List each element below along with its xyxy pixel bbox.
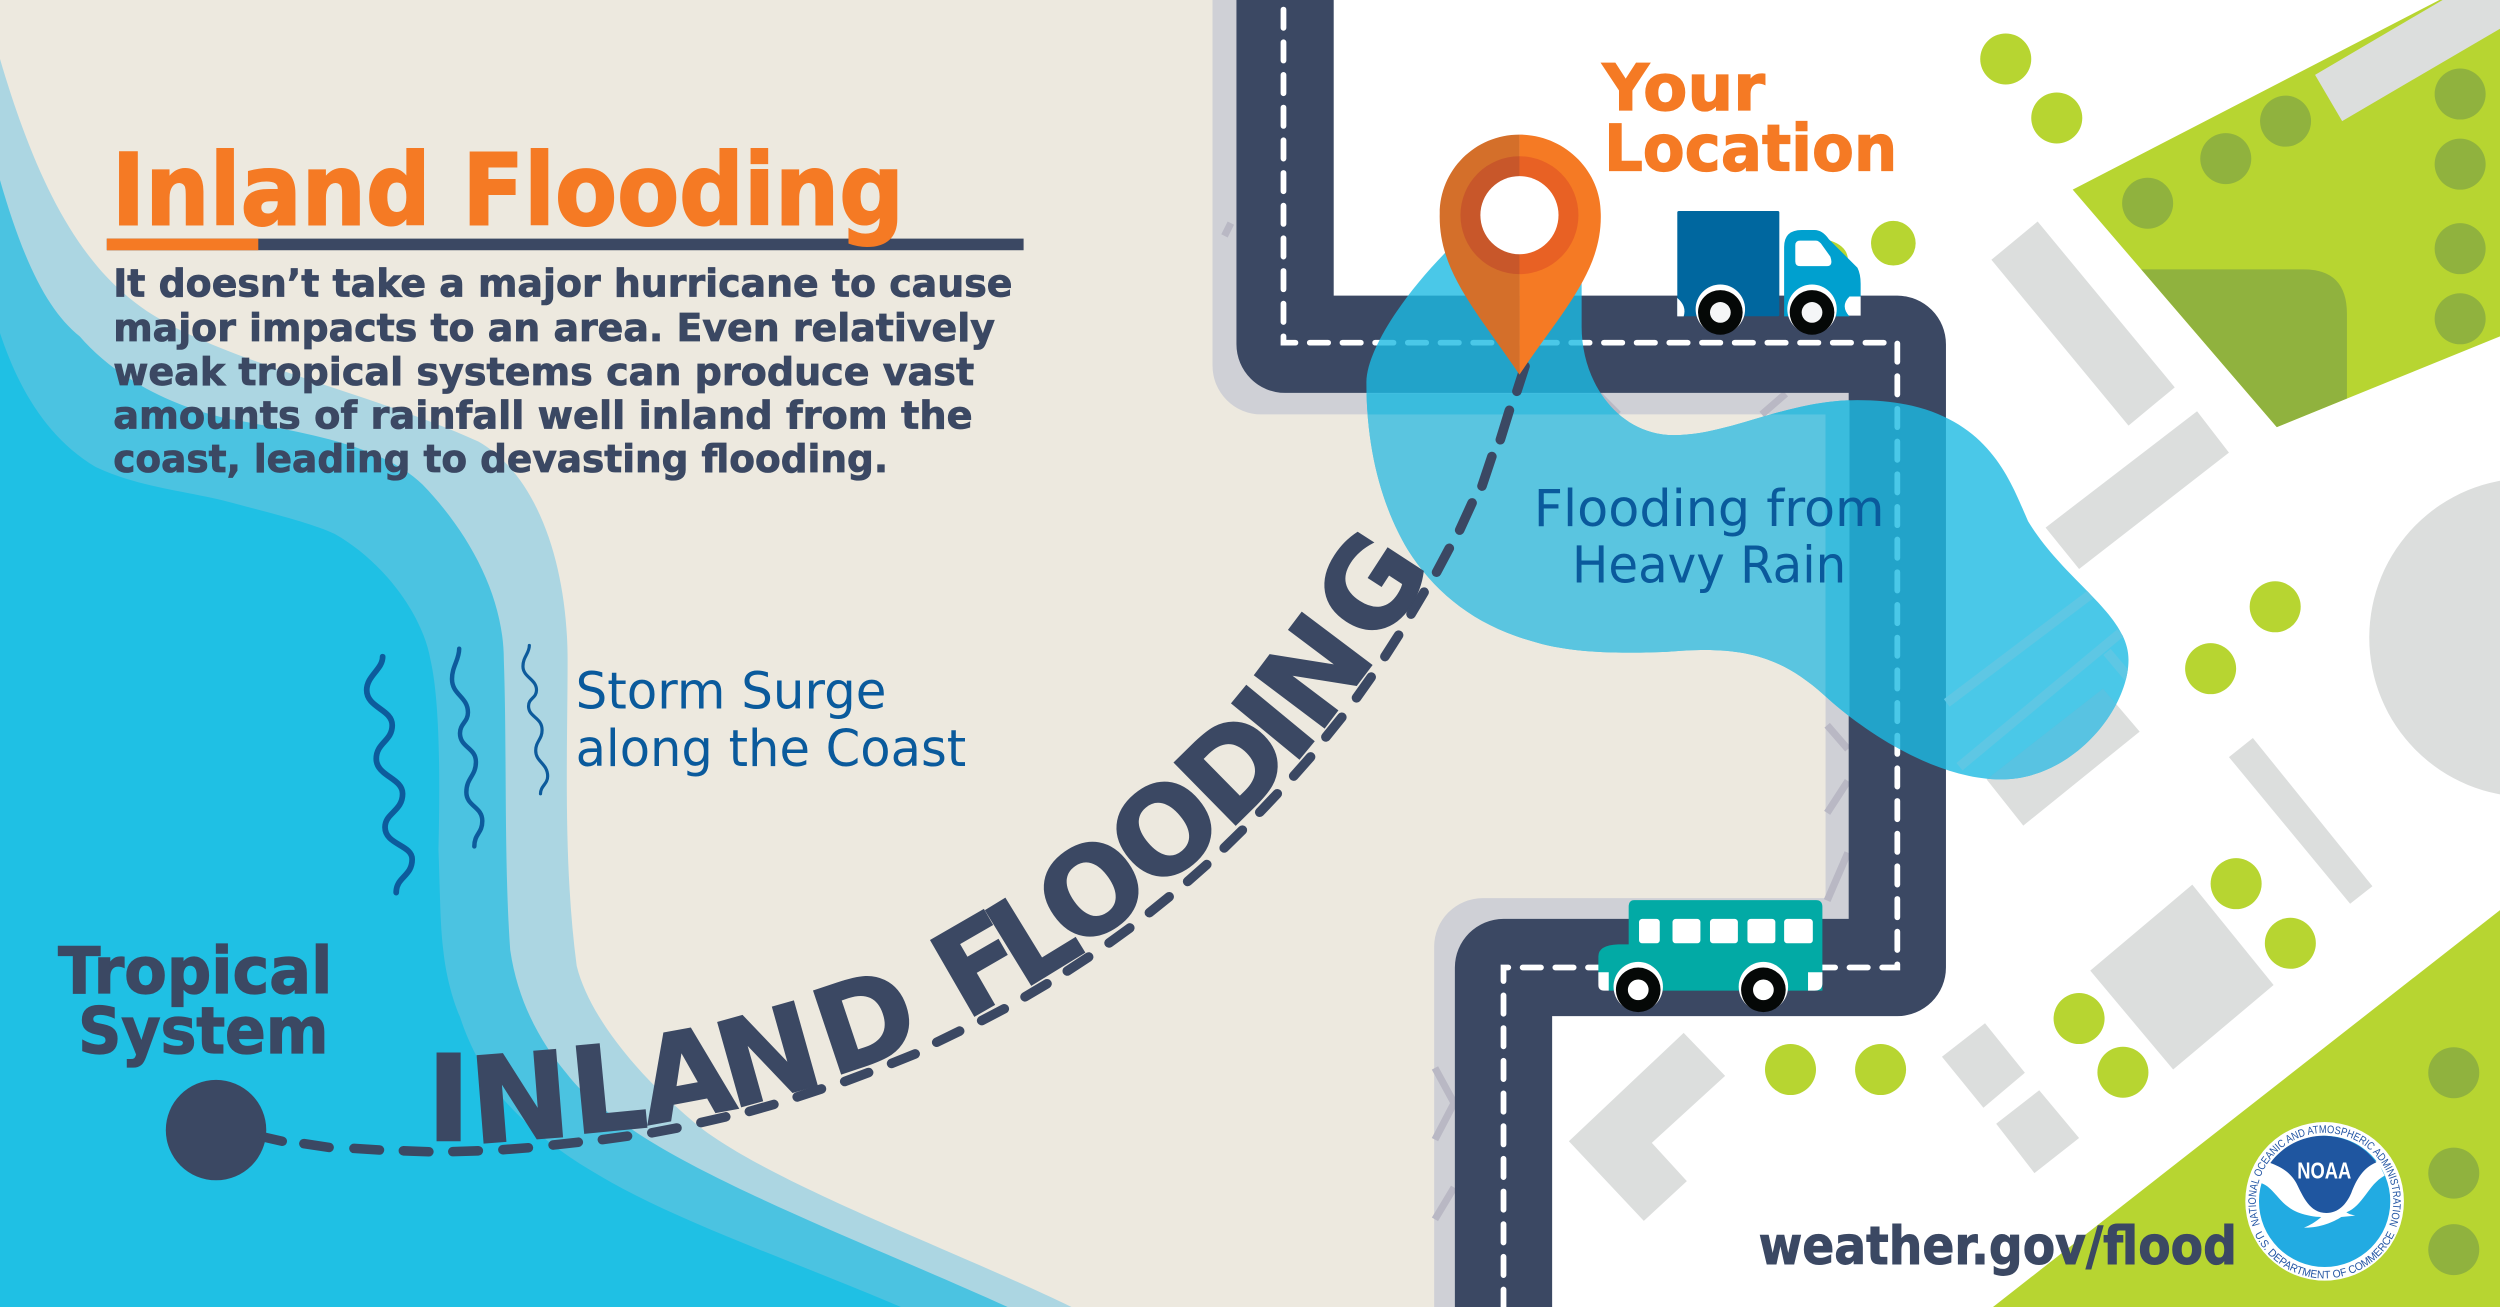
green park top right	[2073, 0, 2500, 427]
NOAA logo	[2245, 1122, 2404, 1281]
dashed storm track	[265, 366, 1525, 1152]
label: tropical system: System	[78, 995, 328, 1069]
grey buildings	[1569, 222, 2500, 1221]
website url: weather.gov/flood	[1759, 1216, 2237, 1277]
body paragraph: weak tropical systems can produce vast	[113, 350, 974, 395]
white city block	[1285, 0, 2500, 1307]
NOAA logo: NATIONAL OCEANIC AND ATMOSPHERIC ADMINISTRATION	[2248, 1125, 2401, 1227]
bus	[1598, 900, 1822, 1012]
body paragraph: major impacts to an area. Even relatively	[113, 306, 995, 351]
label: your location	[1601, 51, 1897, 187]
body paragraph: coast, leading to devasting flooding.	[113, 437, 888, 482]
shoulder streaks	[1224, 223, 1848, 1219]
title: Inland Flooding	[112, 134, 904, 249]
label: your location: Location	[1604, 112, 1897, 187]
trees	[1765, 33, 2316, 1098]
NOAA logo: NOAA	[2297, 1158, 2351, 1184]
road	[1285, 0, 1897, 1307]
heading rule	[107, 239, 1024, 250]
curved label: inland flooding: INLAND FLOODING	[426, 507, 1458, 1173]
label: storm surge: along the Coast	[576, 720, 966, 779]
coast bands	[0, 59, 1071, 1307]
body paragraph: amounts of rainfall well inland from the	[113, 394, 973, 439]
label: tropical system: Tropical	[58, 935, 332, 1009]
label: storm surge	[576, 662, 966, 779]
body paragraph	[113, 261, 1012, 482]
truck	[1677, 211, 1861, 335]
label: tropical system	[58, 935, 332, 1069]
label: storm surge: Storm Surge	[576, 662, 886, 721]
wave lines: storm surge	[367, 646, 548, 893]
NOAA logo: U.S. DEPARTMENT OF COMMERCE	[2256, 1231, 2394, 1278]
road centre line	[1283, 0, 1897, 1307]
body paragraph: It doesn’t take a major hurricane to cause	[113, 261, 1012, 306]
green park bottom right	[1993, 910, 2500, 1307]
flood water	[1366, 252, 2128, 780]
label: flooding from heavy rain: Flooding from	[1534, 480, 1885, 539]
road shoulder	[1261, 0, 1874, 1307]
tropical system marker	[166, 1080, 266, 1180]
label: your location: Your	[1601, 51, 1765, 126]
location pin	[1440, 135, 1601, 375]
label: flooding from heavy rain	[1534, 480, 1885, 596]
label: flooding from heavy rain: Heavy Rain	[1572, 537, 1846, 596]
